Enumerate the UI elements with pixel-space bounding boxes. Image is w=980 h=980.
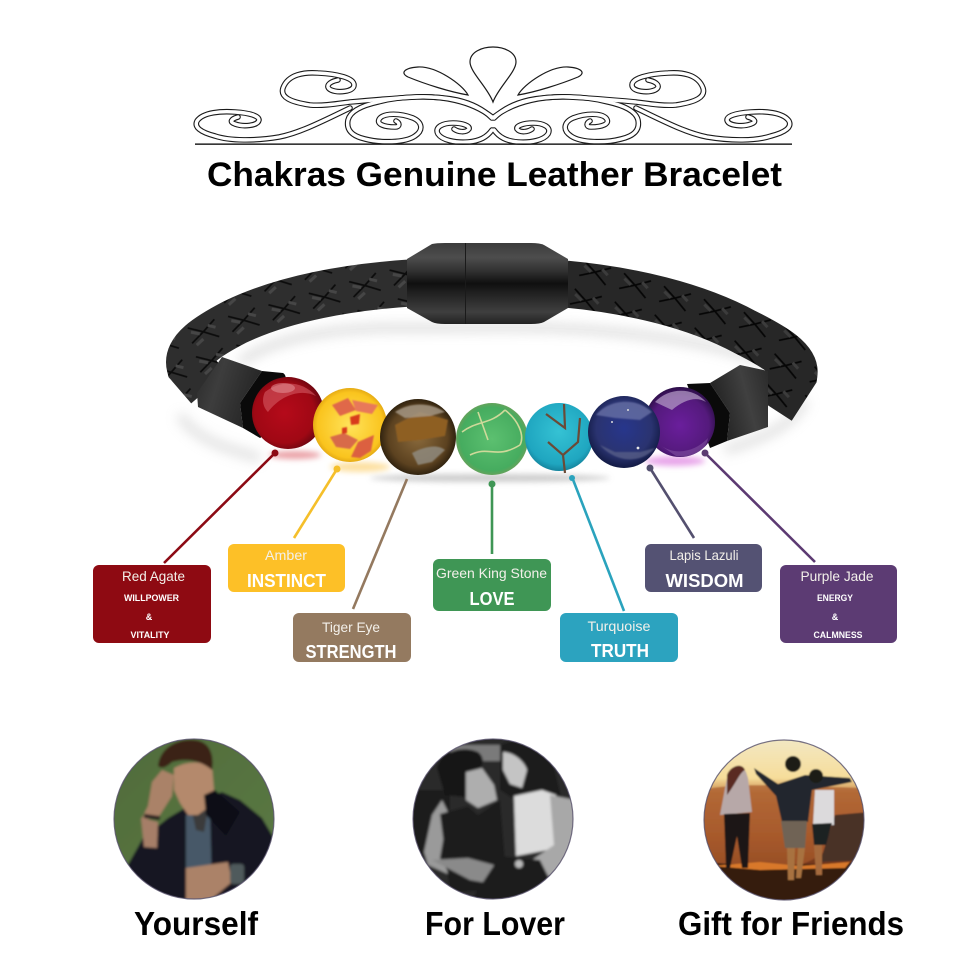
panel: green king stone: LOVE [470, 589, 514, 609]
photo: couple [413, 739, 573, 899]
panel: tiger eye [293, 613, 411, 662]
panel: red agate [93, 565, 211, 643]
caption: yourself: Yourself [134, 905, 259, 942]
connector: lapis lazuli [646, 464, 694, 538]
connector: amber [294, 466, 340, 538]
panel: lapis lazuli: Lapis Lazuli [670, 547, 738, 563]
panel: lapis lazuli: WISDOM [666, 571, 744, 591]
panel: green king stone: Green King Stone [436, 565, 547, 581]
panel: tiger eye: Tiger Eye [322, 619, 380, 635]
connector: tiger eye [353, 479, 407, 609]
panel: tiger eye: STRENGTH [306, 642, 396, 662]
panel: purple jade: Purple Jade [800, 568, 874, 584]
panel: purple jade: & [832, 612, 839, 622]
panel: purple jade [780, 565, 897, 643]
circle ring: photo outlines [114, 739, 864, 900]
bead: red agate [252, 377, 324, 449]
panel: purple jade: CALMNESS [814, 630, 862, 640]
bracelet [180, 243, 805, 482]
connector: green king stone [488, 480, 496, 554]
bead: green king stone [456, 403, 528, 475]
caption: for lover: For Lover [425, 905, 565, 942]
panel: amber: Amber [265, 547, 307, 563]
leather band left [190, 283, 410, 388]
panel: lapis lazuli [645, 544, 762, 592]
left end cap [197, 357, 286, 438]
panel: purple jade: ENERGY [817, 593, 853, 603]
panel: red agate: WILLPOWER [124, 593, 179, 603]
panel: red agate: VITALITY [130, 630, 170, 640]
bead: amber [313, 388, 387, 462]
panel: turquoise: TRUTH [591, 641, 649, 661]
caption: gift for friends: Gift for Friends [678, 905, 904, 942]
connector: turquoise [569, 475, 624, 611]
connector: purple jade [702, 450, 815, 562]
icon: decorative scroll ornament [195, 47, 792, 145]
photo: friends at sunset [704, 740, 864, 900]
title: Chakras Genuine Leather Bracelet [207, 156, 782, 194]
panel: turquoise: Turquoise [588, 618, 651, 634]
bead: tiger eye [380, 399, 456, 475]
connector: red agate [164, 450, 278, 563]
panel: amber [228, 544, 345, 592]
panel: red agate: Red Agate [122, 568, 185, 584]
panel: red agate: & [146, 612, 153, 622]
bead: purple jade [645, 387, 715, 457]
bead: turquoise [525, 403, 593, 473]
leather band right [565, 284, 794, 408]
right end cap [687, 365, 768, 448]
panel: turquoise [560, 613, 678, 662]
panel: amber: INSTINCT [247, 571, 326, 591]
shadows under band and beads [180, 328, 805, 482]
bead: lapis lazuli [588, 396, 660, 468]
panel: green king stone [433, 559, 551, 611]
clasp [407, 243, 568, 324]
photo: man [114, 739, 274, 899]
